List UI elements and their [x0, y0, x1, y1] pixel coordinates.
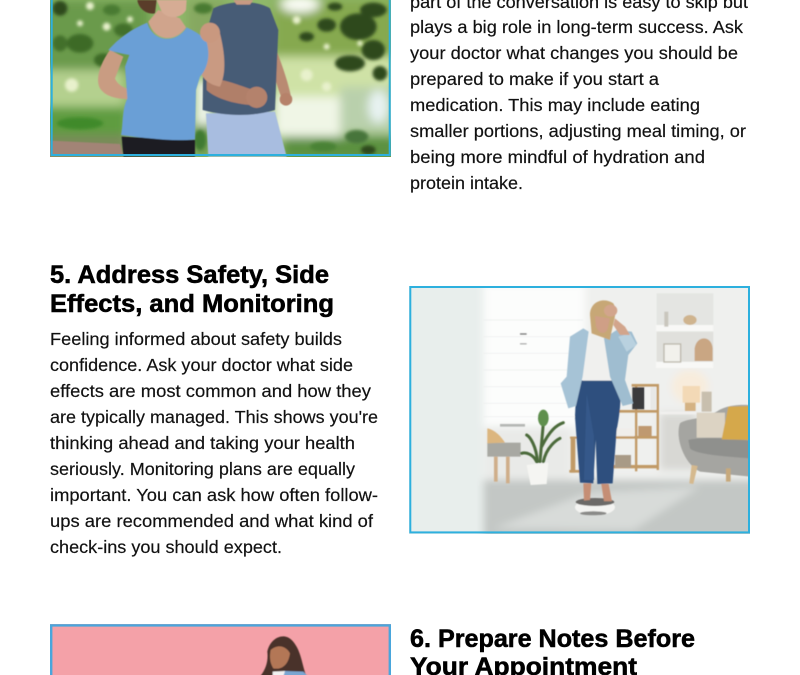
man shirt	[203, 2, 278, 115]
text block: section 4 continuation: your doctor what changes you should be	[410, 43, 738, 63]
text block: section 5 body: Feeling informed about safety builds	[50, 329, 342, 349]
woman arm back	[98, 50, 137, 100]
bookcase	[660, 412, 697, 414]
photo: woman against pink background	[50, 624, 391, 675]
shelves	[657, 293, 713, 325]
text block: section 4 continuation: being more mindful of hydration and	[410, 147, 705, 167]
photo border	[52, 0, 390, 155]
text block: section 4 continuation: medication. This may include eating	[410, 95, 700, 115]
braided hair	[260, 636, 307, 675]
heading: section 6: 6. Prepare Notes Before	[410, 625, 695, 653]
arm and hand	[613, 318, 630, 335]
text block: section 4 continuation: smaller portions, adjusting meal timing, or	[410, 121, 746, 141]
photo border	[410, 287, 749, 532]
man shorts	[206, 112, 287, 157]
photo border	[51, 625, 390, 675]
plant and pot	[527, 463, 548, 485]
path in foreground	[50, 141, 123, 156]
face	[270, 646, 290, 669]
text block: section 5 body: effects are most common and how they	[50, 381, 371, 401]
photo: couple jogging outdoors	[50, 0, 391, 157]
heading: section 5: 5. Address Safety, Side	[50, 261, 329, 289]
scale	[575, 499, 615, 515]
woman neck and face	[148, 10, 186, 38]
lamp	[683, 386, 700, 403]
man forearm	[207, 79, 263, 105]
blinds lines	[483, 320, 583, 417]
text block: section 5 body: ups are recommended and what kind of	[50, 511, 373, 531]
text block: section 5 body: check-ins you should expect.	[50, 537, 282, 557]
woman leggings	[122, 137, 195, 157]
woman denim jacket	[561, 328, 589, 408]
head and hair	[590, 300, 615, 340]
photo: woman on bathroom scale in living room	[409, 286, 750, 534]
text block: section 5 body: confidence. Ask your doctor what side	[50, 355, 353, 375]
heading: section 5: Effects, and Monitoring	[50, 290, 334, 318]
woman hand and arm	[202, 33, 224, 87]
text block: section 5 body: thinking ahead and taking your health	[50, 433, 355, 453]
bench	[487, 443, 521, 457]
text block: section 4 continuation: prepared to make if you start a	[410, 69, 659, 89]
denim shirt	[273, 671, 308, 675]
heading: section 6	[410, 625, 695, 675]
woman shirt	[108, 23, 211, 140]
woman top	[583, 340, 612, 381]
feet	[583, 483, 591, 501]
man arms	[271, 47, 291, 98]
woman jeans	[575, 379, 621, 484]
text block: section 5 body: important. You can ask how often follow-	[50, 485, 378, 505]
text block: section 5 body	[50, 329, 378, 557]
text block: section 4 continuation	[410, 0, 748, 193]
heading: section 5	[50, 261, 334, 318]
text block: section 4 continuation: protein intake.	[410, 173, 523, 193]
text block: section 4 continuation: plays a big role in long-term success. Ask	[410, 17, 743, 37]
text block: section 5 body: are typically managed. This shows you're	[50, 407, 378, 427]
sofa	[679, 405, 750, 477]
text block: section 5 body: seriously. Monitoring plans are equally	[50, 459, 355, 479]
